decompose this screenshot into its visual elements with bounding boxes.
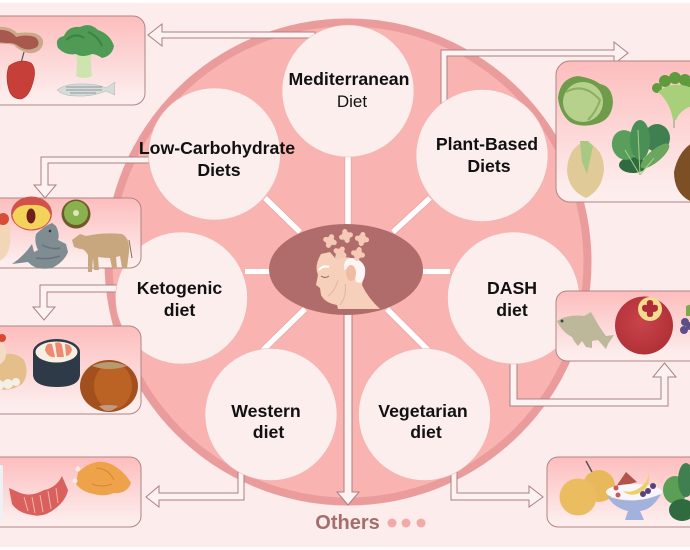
label: Ketogenic diet: diet: [164, 300, 195, 320]
label: Western diet: Western: [231, 401, 301, 421]
arrow: Mediterranean to foods: [148, 24, 315, 46]
arrow: Vegetarian to foods: [451, 470, 543, 507]
icon: striped fish: [57, 82, 115, 96]
label: DASH diet: DASH: [487, 278, 537, 298]
arrow: Plant-based to foods: [441, 42, 628, 105]
label: Low-Carbohydrate Diets: Low-Carbohydrate: [139, 138, 295, 158]
panel: Vegetarian foods: [547, 457, 690, 527]
icon: sushi roll: [33, 339, 80, 387]
icon: cow: [72, 233, 132, 272]
icon: chicken: [0, 213, 10, 262]
icon: broccoli: [57, 25, 114, 78]
icon: grapes: [680, 304, 690, 334]
arrow: centre to Others: [337, 310, 359, 505]
label: Ketogenic diet: Ketogenic: [137, 278, 222, 298]
node: Western circle: [205, 348, 337, 480]
panel: Plant-based foods: [556, 61, 690, 202]
spokes connecting the centre to the diets: [245, 157, 450, 350]
arrow: Ketogenic to foods: [33, 285, 120, 320]
icon: red fruit: [615, 296, 673, 354]
centre: ellipse with head and puzzle pieces: [269, 224, 423, 315]
icon: human head profile: [316, 252, 380, 309]
node: Low-Carbohydrate circle: [148, 88, 280, 220]
icon: lettuce: [652, 72, 690, 128]
central large circle: [104, 18, 592, 506]
label: DASH diet: diet: [496, 300, 528, 320]
panel: DASH foods: [556, 291, 690, 361]
node: Plant-Based circle: [416, 90, 548, 222]
panel: Western foods: [0, 457, 141, 527]
label: Mediterranean Diet: Mediterranean: [289, 69, 409, 89]
icon: peanut: [0, 27, 43, 63]
icon: red cashew apple: [7, 61, 35, 99]
icon: bottle: [0, 465, 3, 521]
icon: hazelnut: [80, 360, 138, 412]
label: Others with three dots: Others: [315, 512, 380, 534]
icon: grey fish: [12, 223, 68, 269]
icon: hen on nest: [0, 334, 27, 390]
icon: spinach: [609, 120, 673, 175]
label: Others with three dots: [315, 512, 426, 534]
icon: pistachio: [567, 141, 604, 198]
icon: peach half: [11, 196, 52, 230]
panel: Mediterranean foods: [0, 16, 145, 105]
label: Mediterranean Diet: Diet: [337, 92, 367, 111]
node: Mediterranean circle: [282, 25, 414, 157]
label: Western diet: diet: [253, 422, 284, 442]
node: Vegetarian circle: [358, 348, 490, 480]
icon: red meat: [9, 476, 68, 516]
arrow: Low-carbohydrate to foods: [34, 157, 150, 198]
icon: yellow pears: [560, 461, 615, 516]
icon: cabbage: [558, 76, 613, 126]
label: Plant-Based Diets: Plant-Based: [436, 134, 538, 154]
node: DASH circle: [448, 232, 580, 364]
icon: roast chicken: [72, 462, 131, 495]
arrow: Western to foods: [146, 470, 244, 507]
icon: carp: [557, 312, 614, 349]
arrow: DASH to foods: [510, 360, 676, 406]
panel: Ketogenic foods: [0, 326, 141, 414]
icon: kiwi: [62, 200, 90, 228]
label: Plant-Based Diets: Diets: [467, 156, 511, 176]
icon: puzzle pieces: [321, 227, 370, 263]
label: Vegetarian diet: Vegetarian: [378, 401, 468, 421]
icon: spinach: [663, 463, 690, 521]
icon: almond: [674, 143, 690, 202]
label: Low-Carbohydrate Diets: Diets: [197, 160, 241, 180]
panel: Low-carbohydrate foods: [0, 196, 141, 272]
node: Ketogenic circle: [116, 232, 248, 364]
icon: fruit bowl: [606, 470, 662, 520]
label: Vegetarian diet: diet: [410, 422, 442, 442]
